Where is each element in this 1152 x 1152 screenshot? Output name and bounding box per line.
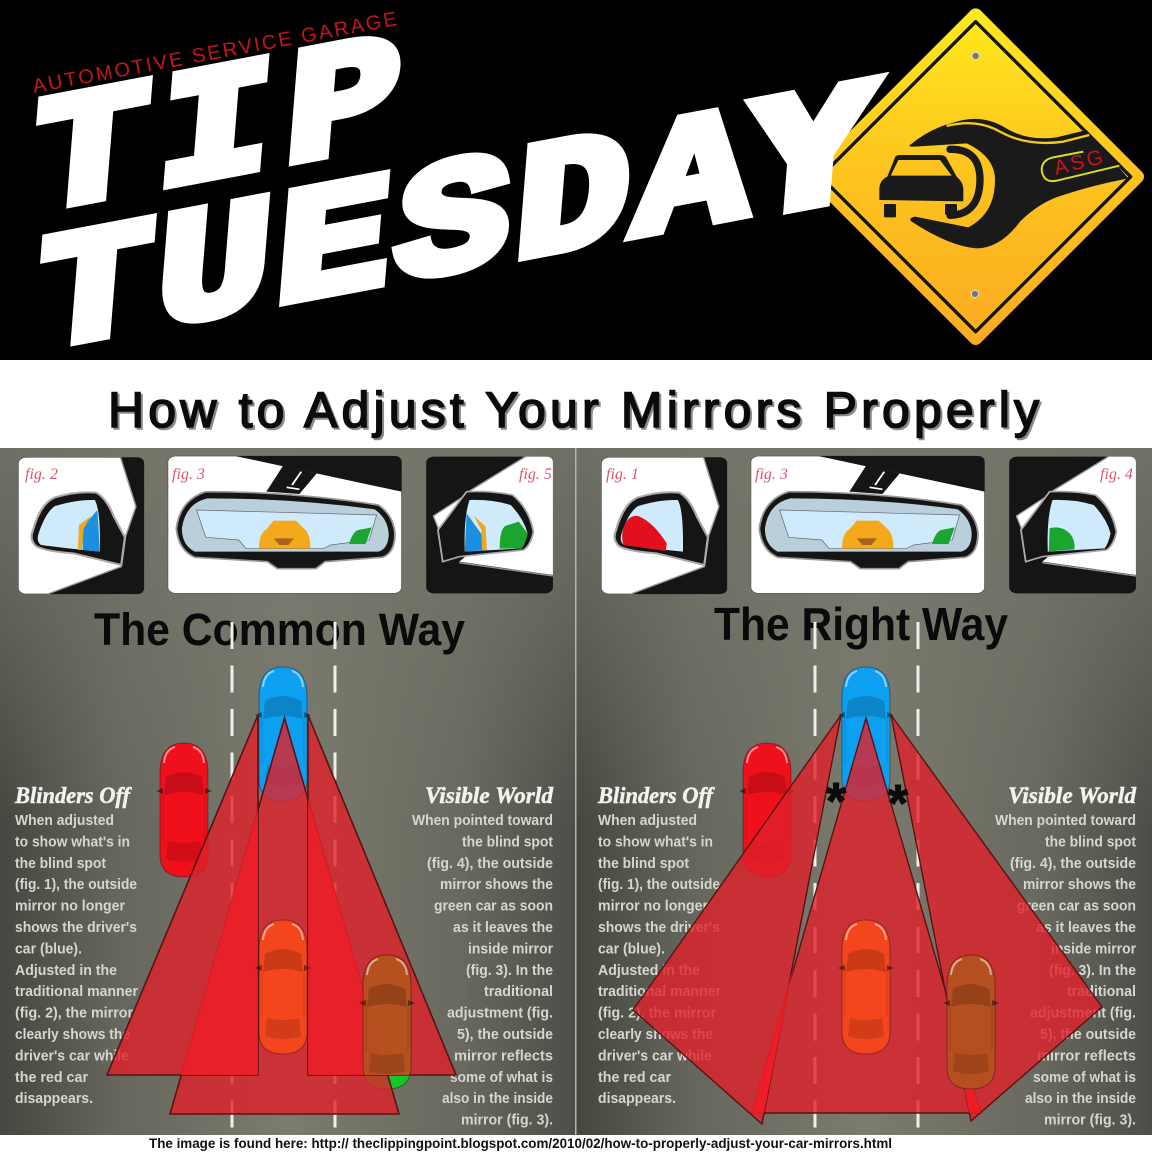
heading: TIP: TIP — [26, 4, 407, 260]
panel divider — [575, 448, 576, 1135]
text block: blinders off: (fig. 1), the outside — [15, 876, 137, 893]
text block: visible world — [412, 783, 553, 1129]
text block: visible world: mirror shows the — [1023, 876, 1136, 893]
text block: blinders off: (fig. 2), the mirror — [598, 1005, 716, 1022]
bottom screw — [971, 290, 979, 298]
text block: visible world: mirror shows the — [440, 876, 553, 893]
fig 5 label: fig. 5 — [519, 466, 552, 483]
fig 4 mirror card — [1009, 457, 1136, 593]
text block: blinders off: to show what's in — [15, 833, 130, 850]
heading: Blinders Off — [14, 783, 132, 808]
text block: blinders off: Adjusted in the — [15, 962, 117, 979]
tinted green car — [943, 955, 999, 1089]
panel: the right way — [576, 448, 1152, 1135]
fig 3 label: fig. 3 — [755, 466, 788, 483]
right blind spot asterisk: * — [888, 775, 909, 833]
text block: visible world — [995, 783, 1136, 1129]
text block: blinders off: driver's car while — [15, 1047, 129, 1064]
left overlap — [181, 810, 258, 1075]
heading: TUESDAY: TUESDAY — [30, 55, 875, 398]
text block: blinders off: the blind spot — [598, 855, 689, 872]
text block: visible world: traditional — [1067, 983, 1136, 1000]
text block: blinders off: the red car — [598, 1069, 671, 1086]
text block: visible world: When pointed toward — [995, 812, 1136, 829]
fig 3 mirror card — [751, 456, 985, 593]
text block: visible world: (fig. 4), the outside — [427, 855, 553, 872]
right mirror cone — [308, 715, 456, 1075]
text block: visible world: mirror reflects — [1037, 1047, 1136, 1064]
lane lines — [815, 622, 918, 1128]
header band — [0, 0, 1152, 398]
text block: visible world: mirror (fig. 3). — [1044, 1112, 1136, 1129]
text block: blinders off: disappears. — [598, 1090, 676, 1107]
top screw — [972, 52, 979, 60]
text block: blinders off: mirror no longer — [15, 898, 125, 915]
heading: Visible World — [425, 783, 553, 808]
orange car under cone — [255, 920, 311, 1054]
text block: visible world: some of what is — [1033, 1069, 1136, 1086]
text block: visible world: green car as soon — [1017, 898, 1136, 915]
left mirror cone — [107, 715, 258, 1075]
warning sign logo — [814, 15, 1137, 338]
text block: blinders off: (fig. 1), the outside — [598, 876, 720, 893]
tinted green car — [359, 954, 415, 1075]
ASG label: ASG — [1052, 145, 1108, 180]
text block: visible world: adjustment (fig. — [1030, 1005, 1136, 1022]
right overlap — [945, 990, 981, 1113]
text block: blinders off: clearly shows the — [598, 1026, 713, 1043]
red car — [156, 743, 212, 877]
text block: blinders off: Adjusted in the — [598, 962, 700, 979]
text block: blinders off: traditional manner — [15, 983, 138, 1000]
text block: blinders off: clearly shows the — [15, 1026, 130, 1043]
wrench icon — [909, 119, 1128, 248]
car icon — [879, 155, 963, 217]
text block: visible world: the blind spot — [1045, 833, 1136, 850]
text block: blinders off: the blind spot — [15, 855, 106, 872]
left overlap — [752, 967, 794, 1113]
right mirror cone — [891, 715, 1102, 1121]
panel title: The Common Way — [94, 604, 465, 655]
green car — [359, 955, 415, 1089]
text block: blinders off: the red car — [15, 1069, 88, 1086]
fig 1 label: fig. 1 — [606, 466, 639, 483]
lane lines — [232, 622, 335, 1128]
text block: visible world: the blind spot — [462, 833, 553, 850]
view cones — [633, 715, 1102, 1124]
heading: Blinders Off — [597, 783, 715, 808]
text block: visible world: When pointed toward — [412, 812, 553, 829]
source caption: The image is found here: http:// theclippingpoint.blogspot.com/2010/02/how-to-properly-adjust-your-car-mirrors.html — [149, 1135, 892, 1151]
orange car under cone — [838, 920, 894, 1054]
sign inner border — [821, 22, 1131, 332]
panel: the common way — [0, 448, 575, 1135]
fig 1 mirror card — [601, 457, 727, 594]
text block: visible world: some of what is — [450, 1069, 553, 1086]
text block: blinders off: disappears. — [15, 1090, 93, 1107]
text block: visible world: also in the inside — [1025, 1090, 1136, 1107]
text block: visible world: inside mirror — [468, 940, 553, 957]
sign plate — [814, 15, 1137, 338]
left mirror cone — [633, 715, 841, 1124]
text block: visible world: also in the inside — [442, 1090, 553, 1107]
title strip — [0, 360, 1152, 448]
text block: blinders off: to show what's in — [598, 833, 713, 850]
inside mirror cone — [752, 718, 981, 1113]
text block: visible world: adjustment (fig. — [447, 1005, 553, 1022]
blue car — [255, 667, 311, 801]
text block: visible world: mirror reflects — [454, 1047, 553, 1064]
text block: blinders off: mirror no longer — [598, 898, 708, 915]
source caption — [0, 1135, 1152, 1152]
inside mirror cone — [170, 718, 399, 1114]
right overlap — [308, 800, 388, 1075]
fig 3 label: fig. 3 — [172, 466, 205, 483]
text block: blinders off: When adjusted — [15, 812, 114, 829]
left blind spot asterisk: * — [826, 773, 847, 831]
fig 2 label: fig. 2 — [25, 466, 58, 483]
text block: visible world: as it leaves the — [1036, 919, 1136, 936]
text block: visible world: (fig. 3). In the — [1049, 962, 1136, 979]
panel title: The Right Way — [714, 598, 1008, 650]
text block: blinders off: When adjusted — [598, 812, 697, 829]
text block: visible world: inside mirror — [1051, 940, 1136, 957]
text block: blinders off: car (blue). — [598, 940, 665, 957]
text block: visible world: 5), the outside — [1040, 1026, 1136, 1043]
text block: visible world: traditional — [484, 983, 553, 1000]
text block: blinders off: (fig. 2), the mirror — [15, 1005, 133, 1022]
view cones — [107, 715, 456, 1114]
fig 4 label: fig. 4 — [1100, 466, 1133, 483]
text block: blinders off: driver's car while — [598, 1047, 712, 1064]
company name: AUTOMOTIVE SERVICE GARAGE — [31, 8, 399, 98]
text block: blinders off — [14, 783, 138, 1107]
text block: visible world: (fig. 4), the outside — [1010, 855, 1136, 872]
text block: blinders off: traditional manner — [598, 983, 721, 1000]
fig 3 mirror card — [168, 456, 402, 593]
heading: Visible World — [1008, 783, 1136, 808]
text block: blinders off — [597, 783, 721, 1107]
text block: visible world: as it leaves the — [453, 919, 553, 936]
title: How to Adjust Your Mirrors Properly — [108, 382, 1039, 438]
text block: visible world: 5), the outside — [457, 1026, 553, 1043]
fig 2 mirror card — [18, 457, 144, 594]
red car — [739, 743, 795, 877]
text block: blinders off: car (blue). — [15, 940, 82, 957]
blue car — [838, 667, 894, 801]
text block: blinders off: shows the driver's — [15, 919, 137, 936]
text block: visible world: mirror (fig. 3). — [461, 1112, 553, 1129]
text block: visible world: (fig. 3). In the — [466, 962, 553, 979]
text block: visible world: green car as soon — [434, 898, 553, 915]
fig 5 mirror card — [426, 457, 553, 593]
text block: blinders off: shows the driver's — [598, 919, 720, 936]
